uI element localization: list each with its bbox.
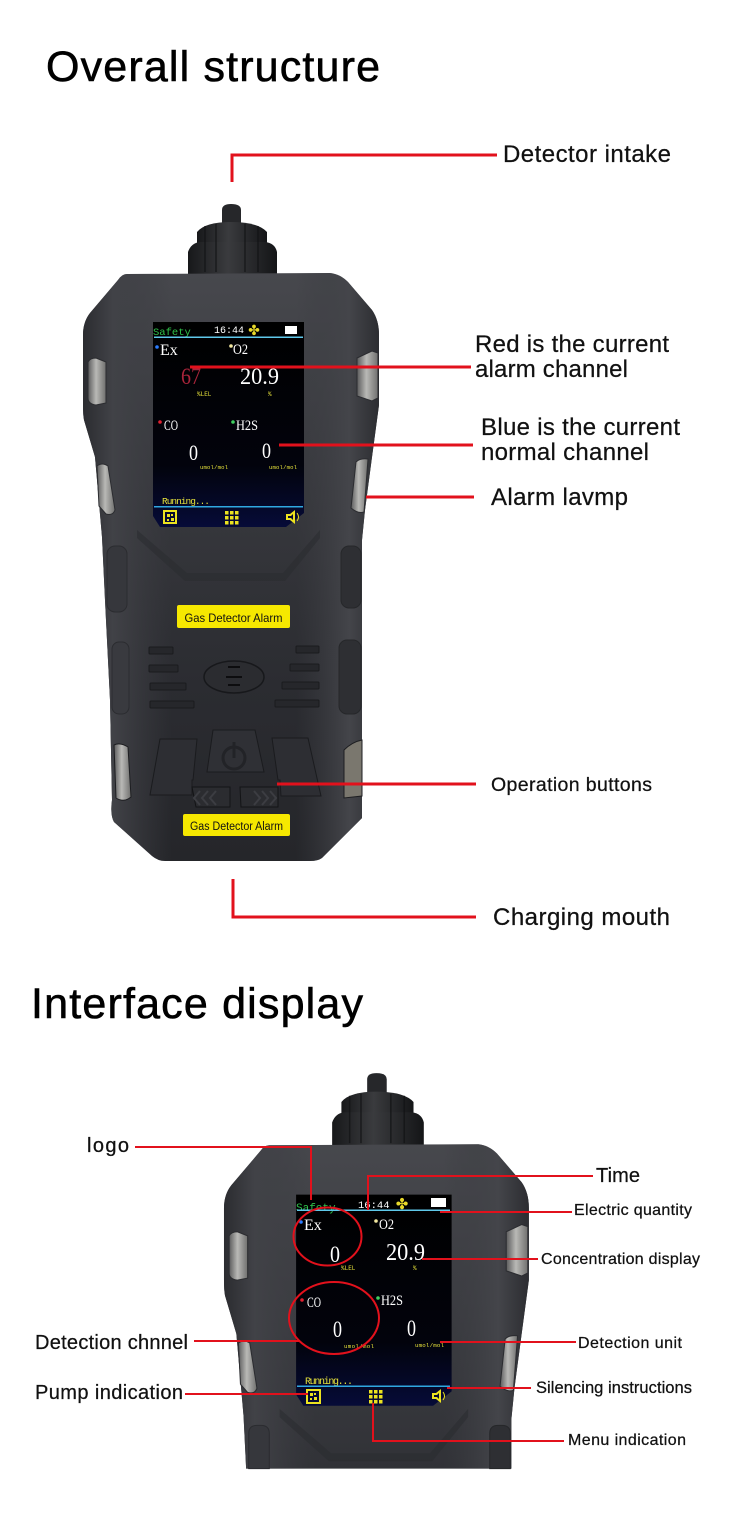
screen readout: channels: CO: [164, 418, 178, 434]
screen readout: channels: %LEL: [197, 391, 212, 398]
screen readout: channels: 0: [262, 438, 271, 463]
callout: electric quantity: Electric quantity: [574, 1202, 692, 1219]
callout: silencing instructions: Silencing instructions: [536, 1379, 692, 1397]
close-up channels: Ex: [304, 1217, 322, 1234]
callout: detection unit: Detection unit: [578, 1335, 683, 1352]
close-up channels: 0: [330, 1242, 340, 1267]
close-up status bar: ✤: [396, 1196, 408, 1213]
screen readout: channels: 0: [189, 440, 198, 465]
screen readout: channels: 67: [181, 364, 201, 389]
callout: detection channel: Detection chnnel: [35, 1332, 188, 1354]
close-up icons: pump, menu, speaker: [306, 1389, 444, 1404]
screen readout: channels: Running...: [162, 496, 210, 507]
close-up channels: %LEL: [341, 1265, 356, 1272]
callout: logo: [87, 1135, 311, 1200]
screen icons: pump, menu, speaker: [163, 510, 298, 524]
callout: detector intake: [232, 141, 671, 182]
device photo: front view: [83, 204, 379, 861]
highlight circle: CO channel: [289, 1282, 379, 1354]
screen readout: channels: umol/mol: [269, 464, 298, 471]
nameplate: upper: Gas Detector Alarm: [184, 611, 283, 625]
title: overall structure: Overall structure: [46, 43, 380, 91]
callout: concentration display: Concentration display: [541, 1251, 700, 1268]
close-up channels: O2: [379, 1217, 394, 1233]
close-up channels: Running...: [305, 1376, 353, 1388]
screen readout: channels: [154, 342, 303, 508]
screen readout: status bar: ✤: [248, 322, 260, 338]
screen readout: status bar: 16:44: [214, 326, 244, 337]
callout: blue normal channel: [279, 414, 680, 466]
callout: charging mouth: [233, 879, 670, 931]
close-up channels: H2S: [381, 1293, 403, 1309]
screen readout: channels: Ex: [160, 342, 178, 359]
device photo: interface close-up: [224, 1073, 529, 1469]
close-up channels: umol/mol: [344, 1343, 375, 1350]
title: interface display: Interface display: [31, 980, 364, 1028]
close-up channels: 0: [333, 1317, 342, 1342]
callout: pump indication: Pump indication: [35, 1382, 183, 1404]
callout: red alarm channel: alarm channel: [475, 356, 628, 383]
close-up status bar: [296, 1196, 450, 1215]
callout: time: [368, 1165, 640, 1210]
close-up channels: [297, 1217, 450, 1388]
callout: red alarm channel: Red is the current: [475, 331, 669, 358]
screen readout: channels: umol/mol: [200, 464, 229, 471]
callout: blue normal channel: Blue is the current: [481, 414, 680, 441]
close-up status bar: Safety: [296, 1203, 336, 1215]
screen readout: channels: O2: [233, 342, 248, 358]
close-up channels: umol/mol: [415, 1342, 445, 1349]
callout: time: Time: [596, 1165, 640, 1187]
callout: alarm lamp: Alarm lavmp: [491, 484, 628, 511]
callout: detector intake: Detector intake: [503, 141, 671, 168]
callout: blue normal channel: normal channel: [481, 439, 649, 466]
callout: menu indication: [373, 1403, 686, 1449]
callout: charging mouth: Charging mouth: [493, 904, 670, 931]
highlight circle: Ex channel: [294, 1208, 362, 1266]
screen readout: channels: %: [268, 391, 272, 398]
nameplate: lower: Gas Detector Alarm: [190, 821, 283, 833]
callout: operation buttons: Operation buttons: [491, 774, 652, 796]
screen readout: status bar: [153, 322, 303, 339]
callout: menu indication: Menu indication: [568, 1432, 686, 1449]
callout: red alarm channel: [190, 331, 669, 383]
screen readout: channels: H2S: [236, 418, 258, 434]
close-up channels: %: [413, 1265, 417, 1272]
close-up status bar: 16:44: [358, 1200, 390, 1212]
close-up channels: 20.9: [386, 1240, 425, 1266]
callout: logo: logo: [87, 1135, 129, 1157]
close-up channels: 0: [407, 1316, 416, 1341]
screen readout: status bar: Safety: [153, 327, 191, 339]
screen readout: channels: 20.9: [240, 364, 279, 389]
close-up channels: CO: [307, 1295, 321, 1311]
